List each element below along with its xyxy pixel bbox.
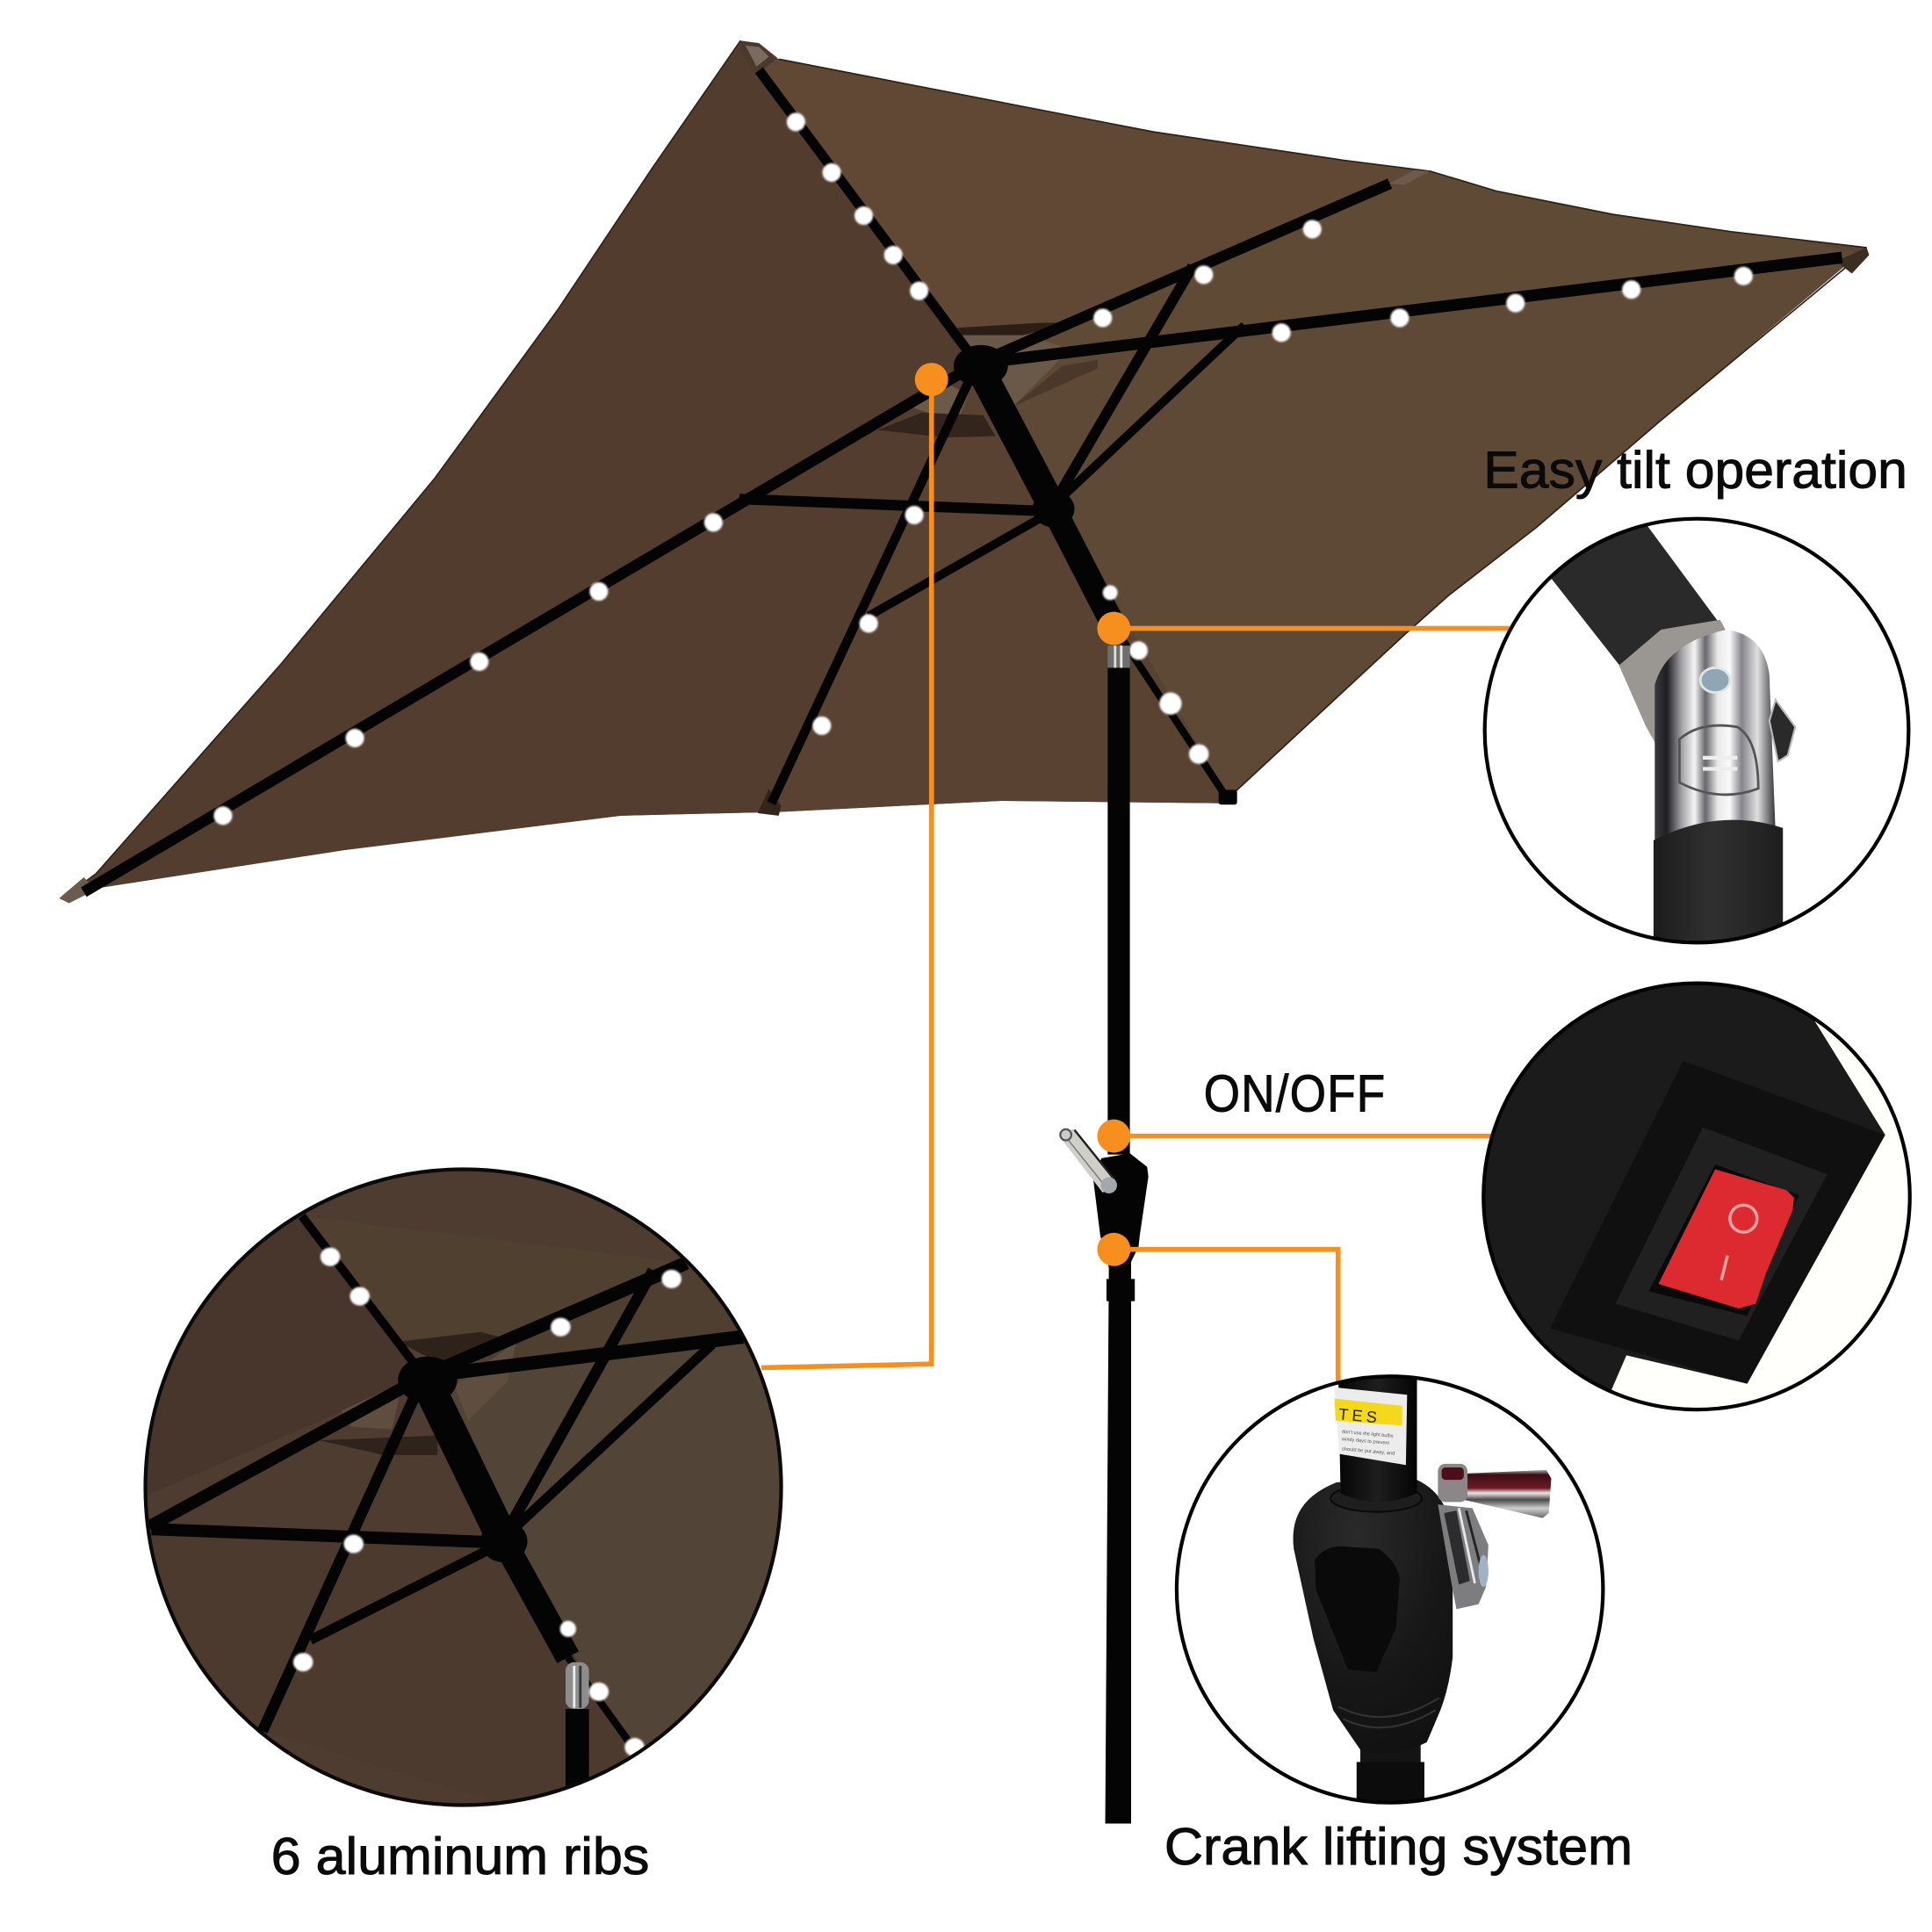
vent detail [319, 1332, 519, 1455]
switch bezel [1615, 1128, 1827, 1341]
housing panel [1315, 1546, 1400, 1672]
crank handle grip [1462, 1470, 1551, 1518]
crank housing body [1294, 1480, 1453, 1753]
warning label [1335, 1388, 1407, 1465]
umbrella pole [1060, 645, 1149, 1824]
joint screw [1700, 667, 1730, 693]
label: easy tilt operation: Easy tilt operation [1483, 443, 1907, 500]
lower tube [1653, 820, 1783, 941]
canopy ribs and struts [83, 70, 1842, 892]
canopy LED lights [213, 112, 1753, 825]
upper tube [1551, 526, 1718, 666]
rocker symbols [1721, 1205, 1757, 1280]
red rocker [1659, 1170, 1794, 1308]
canopy vent [877, 323, 1098, 437]
circle: tilt joint detail [1485, 517, 1908, 973]
circle: on/off switch detail [1467, 973, 1910, 1430]
upper pole [1338, 1367, 1417, 1502]
warning label: windy days to prevent [1341, 1437, 1390, 1446]
warning label: don't use the light bulbs [1342, 1430, 1394, 1439]
circle: ribs detail [143, 1167, 783, 1807]
crank handle arm [1438, 1504, 1489, 1609]
lower pole [1359, 1745, 1421, 1762]
lever [1770, 700, 1795, 761]
warning label: TES [1337, 1404, 1381, 1427]
chrome joint [1654, 630, 1776, 840]
label: crank lifting system: Crank lifting system [1164, 1819, 1633, 1876]
orange marker dots [915, 363, 1130, 1266]
canopy tip caps [59, 40, 1869, 903]
circle: crank detail [1177, 1367, 1603, 1811]
crank housing [1093, 1153, 1149, 1268]
silver collar [1619, 620, 1727, 744]
label: on/off: ON/OFF [1204, 1066, 1386, 1123]
switch box front [1550, 1061, 1885, 1384]
warning label: should be put away, and [1342, 1446, 1395, 1457]
switch box body [1485, 985, 1885, 1389]
orange leader lines [761, 379, 1510, 1382]
joint medallion [1679, 725, 1758, 795]
crank handle [1060, 1128, 1117, 1193]
umbrella canopy [59, 40, 1869, 903]
label: 6 aluminum ribs: 6 aluminum ribs [271, 1828, 649, 1885]
